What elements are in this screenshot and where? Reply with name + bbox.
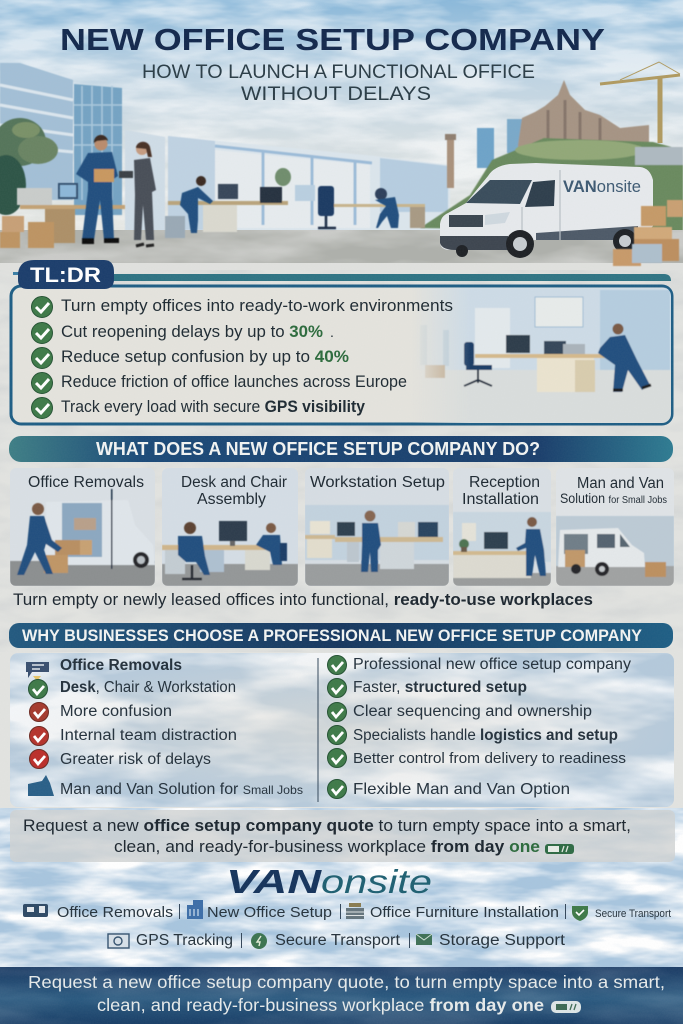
section banner: what does a new office setup company do [9, 436, 673, 462]
construction crane [600, 62, 680, 143]
logo: VANonsite: VAN [226, 863, 323, 900]
caption under cards: Turn empty or newly leased offices into functional, ready-to-use workplaces [13, 590, 593, 609]
faster row: Faster, structured setup [353, 679, 527, 696]
more confusion row [30, 702, 172, 722]
item 4: Reduce friction of office launches across Europe [61, 372, 407, 391]
office removals row [26, 657, 182, 681]
item 1: Turn empty offices into ready-to-work environments [61, 296, 453, 315]
man and van row [28, 775, 303, 798]
desk illustration [405, 288, 672, 424]
icon: shield [572, 906, 588, 921]
item 3: Reduce setup confusion by up to 40% [61, 347, 349, 366]
logo: VANonsite [226, 863, 432, 900]
label: secure transport: Secure Transport [275, 932, 401, 949]
desk chair row: Desk, Chair & Workstation [60, 679, 236, 696]
card: man and van solution: Solution for Small Jobs [560, 491, 667, 506]
glass office facade [125, 130, 450, 235]
more confusion row: More confusion [60, 703, 172, 720]
TL:DR tag [13, 260, 114, 289]
grille and headlamp [449, 215, 483, 227]
label: office removals: Office Removals [57, 904, 173, 921]
lower sky background [0, 808, 683, 968]
side window [525, 180, 555, 207]
hero illustration: city, team, van [0, 0, 683, 270]
van logo: VANonsite [563, 177, 641, 196]
footer band [0, 967, 683, 1024]
item 2: Cut reopening delays by up to 30% [61, 322, 323, 341]
panel: comparison [10, 653, 674, 807]
kneeling worker [375, 188, 399, 228]
subtitle [142, 61, 535, 105]
icon: furniture [346, 903, 364, 919]
card: desk and chair assembly: Desk and Chair [181, 474, 287, 491]
label: new office setup: New Office Setup [207, 904, 332, 921]
card: man and van solution: Man and Van [577, 475, 664, 492]
sky [0, 0, 683, 240]
card: office removals [10, 468, 155, 586]
risk of delays row: Greater risk of delays [60, 751, 211, 768]
van body [440, 163, 653, 250]
distant hill, skyline and castle [420, 80, 683, 232]
clear sequencing row: Clear sequencing and ownership [353, 703, 592, 720]
better control row: Better control from delivery to readiness [353, 750, 626, 767]
windshield [466, 180, 532, 204]
office removals row: Office Removals [60, 657, 182, 674]
man and van row: Man and Van Solution for Small Jobs [60, 781, 303, 798]
section banner: what does a new office setup company do: WHAT DOES A NEW OFFICE SETUP COMPANY DO? [96, 439, 540, 459]
label: secure transport small: Secure Transport [595, 908, 671, 920]
item 2: . [330, 324, 334, 340]
footer band: Request a new office setup company quote, to turn empty space into a smart, [28, 972, 665, 992]
card: desk and chair assembly: Assembly [197, 491, 266, 508]
card: reception installation: Reception [469, 474, 540, 491]
services row 1 [23, 900, 671, 921]
internal distraction row: Internal team distraction [60, 727, 237, 744]
left column: without a specialist [26, 657, 303, 798]
item 5: Track every load with secure GPS visibility [61, 397, 365, 416]
call to action panel: clean, and ready-for-business workplace from day one [114, 837, 540, 856]
logo: VANonsite: onsite [321, 863, 432, 900]
subtitle: HOW TO LAUNCH A FUNCTIONAL OFFICE [142, 61, 535, 83]
section banner: why businesses choose: WHY BUSINESSES CHOOSE A PROFESSIONAL NEW OFFICE SETUP COMPANY [22, 626, 643, 645]
desks and workstations [17, 168, 425, 243]
specialists row: Specialists handle logistics and setup [353, 727, 618, 744]
label: GPS tracking: GPS Tracking [136, 932, 233, 949]
ground [0, 230, 683, 270]
icon: truck [23, 904, 48, 917]
label: storage support: Storage Support [439, 932, 566, 949]
call to action panel [10, 810, 675, 862]
professional row: Professional new office setup company [353, 656, 631, 673]
services row 2 [108, 932, 566, 949]
title: NEW OFFICE SETUP COMPANY [60, 22, 605, 57]
boxes on left [0, 216, 54, 248]
right column: with a professional [328, 656, 631, 798]
card: desk and chair assembly [162, 468, 298, 586]
checklist [32, 296, 453, 418]
worker with clipboard [76, 135, 119, 244]
icon: storage [416, 934, 432, 945]
card: reception installation: Installation [462, 491, 539, 508]
card: workstation setup: Workstation Setup [310, 474, 445, 491]
call to action panel: Request a new office setup company quote to turn empty space into a smart, [23, 816, 631, 835]
door lines [522, 170, 560, 240]
icon: badge [545, 844, 574, 854]
icon: building [187, 900, 203, 919]
card: office removals: Office Removals [28, 474, 144, 491]
delivery van [440, 163, 653, 258]
icon: transport badge [251, 933, 267, 949]
top accent bar [100, 274, 671, 281]
card: man and van solution [556, 468, 674, 586]
panel frame [11, 286, 672, 424]
footer band: clean, and ready-for-business workplace from day one [97, 995, 544, 1015]
label: office furniture installation: Office Furniture Installation [370, 904, 559, 921]
panel background [10, 653, 674, 807]
icon: GPS tracking [108, 934, 129, 948]
wheels [456, 229, 637, 258]
panel: TL:DR [11, 260, 672, 424]
left tree [0, 118, 58, 215]
stacked boxes at right [613, 200, 683, 266]
left office towers [0, 63, 122, 215]
subtitle: WITHOUT DELAYS [241, 83, 431, 105]
worker at desk [180, 176, 213, 233]
card: reception installation [453, 468, 551, 586]
icon: footer badge [551, 1001, 581, 1013]
woman with tablet [119, 142, 156, 246]
column divider [318, 658, 319, 802]
flexible row: Flexible Man and Van Option [353, 781, 570, 798]
TL:DR tag: TL:DR [30, 264, 101, 287]
card: workstation setup [305, 468, 449, 586]
